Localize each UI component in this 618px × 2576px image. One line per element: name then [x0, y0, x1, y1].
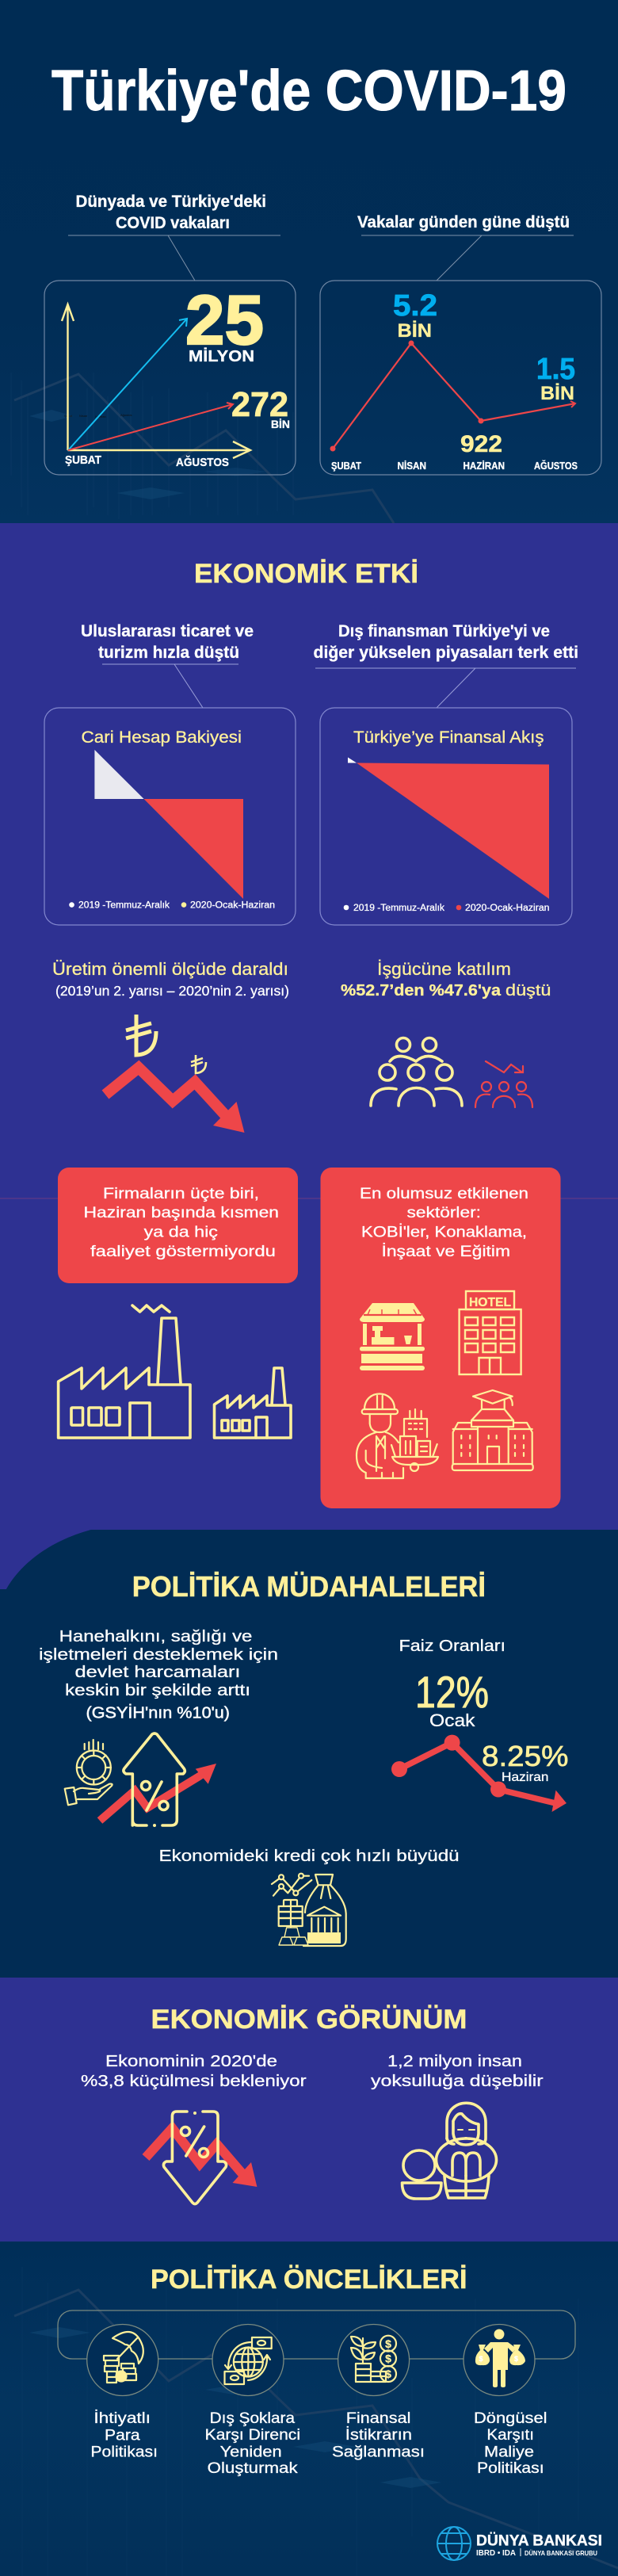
priority: financial stability: $ — [385, 2352, 391, 2365]
priority: resilience to external shocks: Oluşturmak — [208, 2460, 298, 2477]
month labels: NİSAN — [398, 460, 426, 472]
heading: POLİTİKA MÜDAHALELERİ — [132, 1570, 486, 1603]
icon: construction worker — [357, 1393, 438, 1478]
chart: interest rates: 8.25% — [482, 1740, 568, 1772]
axes — [62, 304, 250, 458]
panel: financial flows: Türkiye’ye Finansal Akış — [353, 728, 544, 747]
icon: globe and money — [225, 2337, 272, 2384]
priority: financial stability: Finansal — [346, 2410, 410, 2427]
value: 1.5 thousand: BİN — [540, 383, 574, 404]
legend: 2020-Ocak-Haziran — [465, 904, 550, 913]
icon: coin in hand — [65, 1740, 113, 1805]
value: 5.2 thousand: 5.2 — [393, 289, 437, 323]
icon: falling lira chart — [105, 1015, 244, 1133]
icon: hotel — [460, 1291, 521, 1374]
icon: school — [452, 1390, 533, 1470]
icon: shrinking economy — [146, 2112, 257, 2203]
panel: current account balance: Cari Hesap Bakiyesi — [81, 728, 242, 747]
value: 5.2 thousand — [393, 289, 437, 342]
callout: firms: faaliyet göstermiyordu — [90, 1243, 276, 1260]
legend: 2020-Ocak-Haziran — [190, 900, 275, 910]
subheading: external finance: diğer yükselen piyasaları terk etti — [314, 644, 578, 662]
value: 272 thousand: 272 — [231, 385, 288, 424]
icon: hotel: HOTEL — [469, 1296, 511, 1309]
month labels: AĞUSTOS — [534, 460, 578, 472]
heading: EKONOMİK GÖRÜNÜM — [151, 2005, 467, 2035]
value: 922: 922 — [460, 431, 502, 457]
text: economy shrink: %3,8 küçülmesi bekleniyor — [81, 2073, 307, 2090]
panel: cumulative cases chart: AĞUSTOS — [176, 455, 229, 469]
text: production contracted: Üretim önemli ölçüde daraldı — [52, 959, 288, 979]
text: labour force participation: düştü — [505, 982, 551, 999]
callout: firms: Firmaların üçte biri, — [103, 1185, 259, 1202]
icon: umbrella and coins — [104, 2332, 143, 2383]
priority: resilience to external shocks: Yeniden — [220, 2444, 282, 2460]
priority: prudent monetary policy: Politikası — [90, 2444, 158, 2460]
priority: countercyclical fiscal policy: Döngüsel — [474, 2410, 547, 2427]
priority: financial stability: $ — [385, 2337, 391, 2350]
priority: resilience to external shocks — [205, 2324, 300, 2477]
logo: World Bank: DÜNYA BANKASI — [476, 2533, 602, 2550]
panel: daily cases chart — [320, 281, 601, 475]
callout: firms — [58, 1168, 298, 1283]
text: government spending: Hanehalkını, sağlığı ve — [59, 1628, 252, 1645]
icon: spending rise — [65, 1733, 216, 1827]
priority: prudent monetary policy — [87, 2324, 158, 2460]
chart: interest rates: Haziran — [502, 1771, 548, 1784]
legend: 2019 -Temmuz-Aralık — [78, 900, 170, 910]
panel: cumulative cases chart: Şubat — [64, 414, 73, 418]
month labels: HAZİRAN — [463, 460, 505, 472]
chart: current account triangles — [94, 750, 243, 899]
text: government spending: işletmeleri desteklemek için — [39, 1646, 278, 1664]
month labels: ŞUBAT — [331, 461, 361, 472]
month labels — [331, 460, 578, 472]
panel: most affected sectors: sektörler: — [407, 1204, 481, 1221]
logo: World Bank — [437, 2527, 602, 2560]
value: 25 million: MİLYON — [189, 347, 254, 365]
chart: interest rates — [391, 1667, 568, 1812]
text: labour force participation: İşgücüne katılım — [377, 959, 511, 979]
text: economy shrink: Ekonominin 2020'de — [105, 2053, 277, 2070]
priority: financial stability — [332, 2324, 425, 2460]
section: policy priorities — [0, 2242, 618, 2576]
panel: financial flows — [320, 708, 572, 925]
icon: man with money bags: $ — [514, 2355, 518, 2363]
priority: prudent monetary policy: İhtiyatlı — [93, 2410, 151, 2427]
priority: countercyclical fiscal policy — [464, 2324, 547, 2477]
chart: interest rates: 12% — [415, 1667, 489, 1717]
panel: current account balance — [44, 708, 296, 925]
icon: man with money bags — [475, 2329, 525, 2387]
panel: cumulative cases chart: Haziran — [95, 415, 106, 419]
legend: 2019 -Temmuz-Aralık — [353, 904, 444, 913]
text: government spending: keskin bir şekilde arttı — [65, 1682, 250, 1699]
text: labour force participation — [341, 959, 551, 999]
icon: labour force people — [371, 1038, 532, 1107]
priority: prudent monetary policy: Para — [105, 2427, 140, 2444]
value: 1.5 thousand: 1.5 — [536, 353, 575, 386]
icon: globe logo — [437, 2527, 471, 2560]
priority: countercyclical fiscal policy: Karşıtı — [486, 2427, 534, 2444]
legend — [344, 904, 550, 913]
chart: financial flow triangles — [348, 758, 549, 899]
text: poverty: yoksulluğa düşebilir — [371, 2073, 544, 2090]
priority: countercyclical fiscal policy: Politikası — [477, 2460, 544, 2477]
priority: financial stability: Sağlanması — [332, 2444, 425, 2460]
text: economy shrink — [81, 2053, 307, 2090]
text: credit growth: Ekonomideki kredi çok hızlı büyüdü — [158, 1848, 460, 1865]
section: policy response — [0, 1530, 618, 1978]
subheading: trade and tourism: turizm hızla düştü — [98, 644, 239, 662]
logo: World Bank: DÜNYA BANKASI GRUBU — [525, 2549, 597, 2557]
text: poverty: 1,2 milyon insan — [387, 2053, 522, 2070]
panel: most affected sectors — [320, 1168, 561, 1508]
icon: man with money bags: $ — [479, 2355, 483, 2363]
icon: plant and coins — [351, 2336, 396, 2382]
text: production contracted — [52, 959, 289, 999]
section: header — [0, 0, 618, 523]
text: interest rates label: Faiz Oranları — [399, 1638, 505, 1655]
Türkiye cases arrow — [68, 403, 233, 450]
section: economic outlook — [0, 1978, 618, 2242]
priority: resilience to external shocks: Dış Şoklara — [210, 2410, 295, 2427]
subheading: external finance — [314, 622, 578, 662]
text: poverty — [371, 2053, 544, 2090]
subheading: trade and tourism: Uluslararası ticaret ve — [81, 622, 254, 640]
text: production contracted: (2019’un 2. yarısı – 2020’nin 2. yarısı) — [55, 983, 289, 999]
panel: most affected sectors: En olumsuz etkilenen — [360, 1185, 528, 1202]
icon: kiosk — [360, 1303, 425, 1370]
priority: financial stability: İstikrarın — [345, 2427, 412, 2444]
panel: cumulative cases chart: Ağustos — [120, 413, 132, 417]
line chart — [330, 341, 575, 452]
icon: credit bag and bank — [272, 1874, 346, 1946]
section: economic impact — [0, 523, 618, 2576]
subheading: external finance: Dış finansman Türkiye'yi ve — [338, 622, 550, 640]
red growth arrow — [100, 1764, 216, 1821]
icon: factories — [59, 1305, 291, 1438]
text: government spending — [39, 1628, 278, 1722]
heading: POLİTİKA ÖNCELİKLERİ — [151, 2265, 467, 2295]
heading: EKONOMİK ETKİ — [194, 559, 418, 589]
priority: financial stability: $ — [385, 2368, 391, 2380]
priority: resilience to external shocks: Karşı Direnci — [205, 2427, 300, 2444]
world cases arrow — [68, 319, 187, 450]
heading: world and Türkiye cases — [76, 193, 266, 232]
heading: daily cases fell: Vakalar günden güne düştü — [357, 213, 570, 231]
priority: countercyclical fiscal policy: Maliye — [484, 2444, 534, 2460]
legend — [69, 900, 275, 910]
heading: world and Türkiye cases: Dünyada ve Türkiye'deki — [76, 193, 266, 211]
logo: World Bank: IBRD • IDA — [476, 2548, 516, 2558]
callout: firms: Haziran başında kısmen — [84, 1204, 279, 1221]
text: government spending: (GSYİH'nın %10'u) — [86, 1704, 230, 1722]
value: 1.5 thousand — [536, 353, 575, 404]
text: labour force participation: %52.7’den %47.6'ya — [341, 982, 502, 999]
value: 25 million: 25 — [185, 281, 264, 359]
callout: firms: ya da hiç — [144, 1224, 218, 1241]
value: 272 thousand: BİN — [271, 418, 290, 430]
icon: person in poverty — [402, 2103, 496, 2199]
title: Türkiye'de COVID-19 — [52, 59, 566, 123]
text: government spending: devlet harcamaları — [74, 1664, 241, 1681]
chart: interest rates: Ocak — [429, 1710, 476, 1730]
value: 5.2 thousand: BİN — [398, 320, 432, 342]
heading: world and Türkiye cases: COVID vakaları — [116, 214, 230, 232]
panel: cumulative cases chart: Nisan — [79, 414, 87, 418]
panel: most affected sectors: KOBİ'ler, Konaklama, — [361, 1222, 527, 1241]
subheading: trade and tourism — [81, 622, 254, 662]
panel: cumulative cases chart: ŞUBAT — [65, 453, 101, 467]
panel: cumulative cases chart — [44, 281, 296, 475]
panel: most affected sectors: İnşaat ve Eğitim — [382, 1242, 510, 1260]
